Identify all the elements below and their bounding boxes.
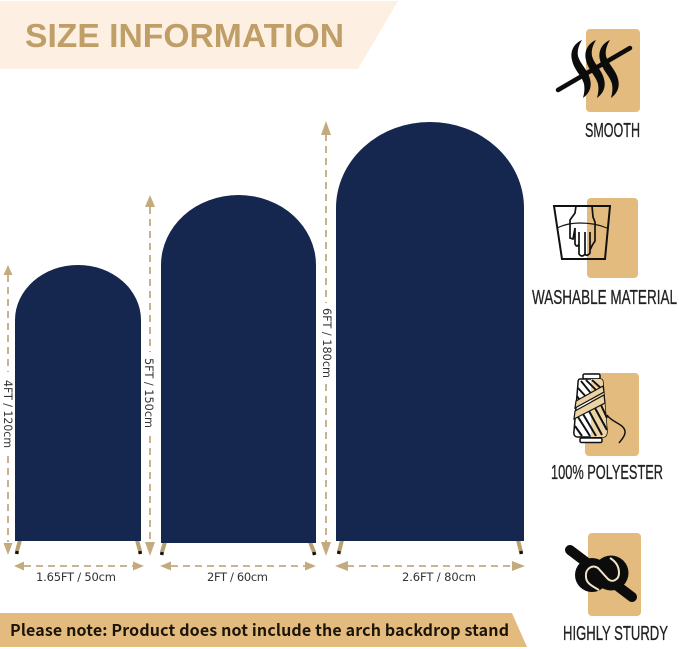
large arch with stand	[336, 122, 524, 554]
icon: smooth waves	[558, 40, 630, 98]
icon: thread spool	[574, 374, 625, 443]
note bar	[0, 613, 527, 647]
height label: 4FT: 4FT / 120cm	[1, 380, 15, 448]
feature: polyester	[551, 373, 663, 484]
width label: 2FT: 2FT / 60cm	[207, 570, 268, 584]
height arrow: medium arch	[142, 195, 156, 556]
width label: 1.65FT: 1.65FT / 50cm	[36, 570, 116, 584]
medium arch with stand	[161, 195, 316, 555]
header banner	[0, 1, 398, 69]
note text: Please note: Product does not include the arch backdrop stand	[10, 617, 509, 641]
height arrow: small arch	[1, 265, 15, 555]
icon: knot	[570, 550, 632, 597]
width arrow: small arch	[14, 562, 144, 584]
feature: washable material	[532, 198, 677, 309]
icon: hand in water	[554, 206, 610, 259]
feature: highly sturdy	[563, 533, 668, 645]
width arrow: medium arch	[160, 562, 316, 584]
feature: smooth	[558, 29, 640, 142]
height label: 5FT: 5FT / 150cm	[142, 358, 156, 428]
height arrow: large arch	[320, 121, 334, 556]
width label: 2.6FT: 2.6FT / 80cm	[402, 570, 476, 584]
small arch with stand	[15, 265, 141, 554]
title: SIZE INFORMATION	[25, 17, 344, 54]
width arrow: large arch	[335, 561, 525, 584]
height label: 6FT: 6FT / 180cm	[320, 308, 334, 378]
label: smooth: SMOOTH	[585, 120, 640, 142]
